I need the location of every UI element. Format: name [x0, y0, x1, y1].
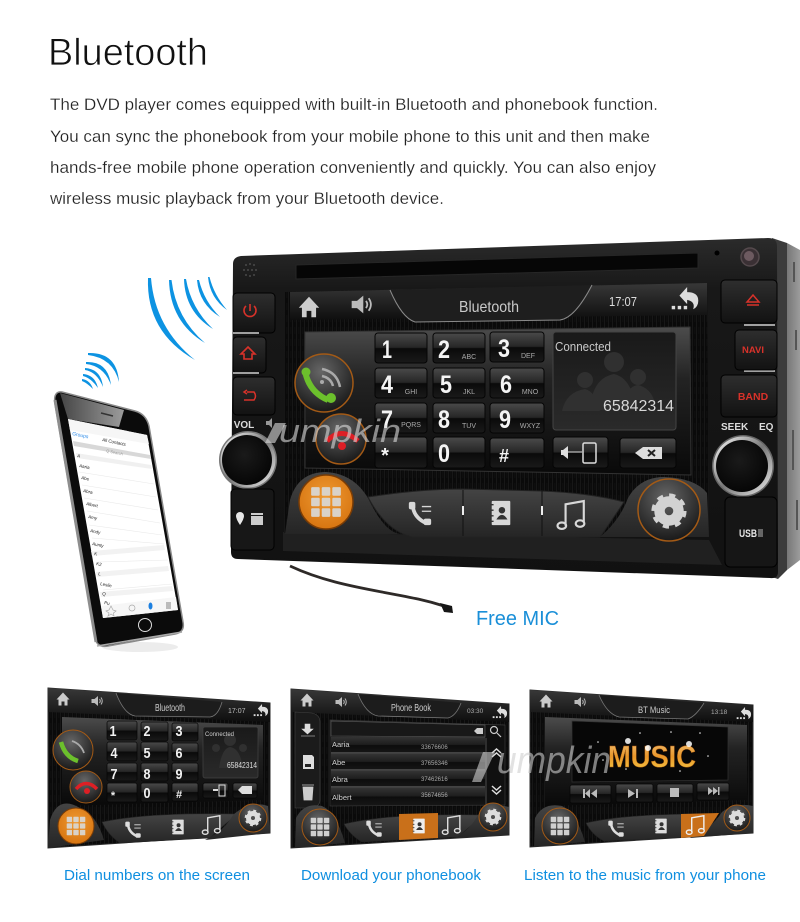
microphone cable	[290, 566, 453, 613]
answer call button	[295, 354, 353, 412]
right button: eject	[721, 280, 777, 323]
bottom dock left shape	[285, 472, 400, 534]
left button: home	[233, 337, 266, 373]
intro paragraph	[49, 96, 658, 208]
bottom dock right shape	[600, 477, 709, 537]
keypad digits: 7	[381, 406, 393, 434]
icon: speaker	[352, 296, 371, 313]
keypad letters: JKL	[463, 389, 475, 396]
seek and eq labels: SEEK	[721, 422, 749, 433]
phone screen text: Abra	[83, 488, 94, 495]
thumbnail: phone book screen: 03:30	[467, 708, 484, 715]
thumbnail: phone book screen: Aaria	[332, 740, 350, 749]
keypad digits	[381, 335, 512, 468]
thumbnail: dial screen	[48, 688, 270, 848]
thumbnail: bt music screen: MUSIC	[608, 739, 696, 774]
watermark: thumbnails: umpkin	[497, 740, 611, 782]
usb port label: USB	[739, 528, 757, 540]
keypad digits: 6	[500, 371, 512, 399]
thumbnail: phone book screen: Abra	[332, 775, 349, 784]
disc slot	[296, 253, 698, 279]
sensor dot and reset knob	[714, 248, 759, 266]
phone screen text: Pu	[104, 600, 111, 606]
speaker dots	[243, 263, 257, 277]
phone home button	[138, 618, 152, 632]
icon: contacts book	[491, 501, 510, 525]
caption: listen to music: Listen to the music from your phone	[524, 868, 766, 884]
phone screen text: Q Search	[106, 448, 123, 456]
car DVD head unit	[219, 238, 800, 579]
phone screen text: Abe	[81, 475, 90, 482]
screen title: Bluetooth	[459, 299, 519, 316]
phone screen text: Leslie	[100, 581, 113, 589]
thumbnail: dial screen: #	[176, 789, 182, 801]
intro paragraph: hands-free mobile phone operation conveniently and quickly. You can also enjoy	[50, 159, 657, 177]
settings gear button	[638, 479, 700, 541]
keypad digits: 1	[382, 336, 392, 364]
thumbnail: dial screen: 17:07	[228, 708, 246, 715]
phone screen text: Aunty	[92, 541, 105, 549]
thumbnail: dial screen: 65842314	[227, 761, 257, 770]
connected status panel: Connected	[555, 339, 611, 354]
phone screen	[68, 419, 178, 618]
thumbnail: bt music screen	[530, 690, 753, 847]
keypad digits: 0	[438, 440, 450, 468]
lower strip	[283, 532, 722, 565]
icon: music note	[558, 501, 584, 529]
keypad letters: MNO	[522, 389, 539, 396]
keypad letters: WXYZ	[520, 423, 541, 430]
phone screen text	[72, 431, 127, 606]
thumbnail: phone book screen: 37462616	[421, 777, 448, 783]
thumbnail: dial screen: 5	[144, 745, 150, 762]
keypad panel	[305, 327, 691, 475]
intro paragraph: You can sync the phonebook from your mobile phone to this unit and then make	[50, 128, 650, 146]
phone screen text: Amy	[88, 514, 98, 521]
volume label: VOL	[234, 420, 254, 431]
icon: large bluetooth signal waves	[148, 277, 227, 360]
thumbnail: dial screen: *	[111, 790, 116, 802]
screen top bar	[290, 283, 707, 320]
keypad letters: TUV	[462, 423, 476, 430]
left button: power	[233, 293, 275, 333]
right button: band	[721, 375, 777, 417]
thumbnail: bt music screen: BT Music	[638, 705, 670, 716]
lower left map and media buttons	[231, 489, 274, 550]
icon: call transfer	[409, 502, 431, 525]
icon: delete key	[635, 447, 662, 459]
keypad digits: 9	[499, 406, 511, 434]
keypad letters	[401, 353, 541, 430]
thumbnail: dial screen: 1	[110, 723, 116, 740]
free mic label: Free MIC	[476, 608, 559, 630]
thumbnail: dial screen: 8	[144, 766, 150, 783]
keypad letters: PQRS	[401, 422, 421, 429]
volume knob	[219, 431, 277, 489]
thumbnail: phone book screen: 37656346	[421, 761, 448, 767]
left button: back	[233, 377, 275, 415]
thumbnail: phone book screen: Abe	[332, 758, 345, 767]
phone screen text: Andy	[90, 528, 102, 535]
apps menu button	[299, 475, 353, 529]
thumbnail: dial screen: Bluetooth	[155, 703, 185, 714]
caption: dial numbers: Dial numbers on the screen	[64, 868, 250, 884]
keypad digits: 5	[440, 371, 452, 399]
right button: navi: NAVI	[742, 345, 764, 356]
usb port label	[725, 497, 777, 567]
right button: band: BAND	[738, 391, 769, 403]
thumbnail: dial screen: 2	[144, 723, 150, 740]
thumbnail: phone book screen: Phone Book	[391, 703, 432, 714]
thumbnail: dial screen: 9	[176, 766, 182, 783]
keypad letters: DEF	[521, 353, 535, 360]
icon: audio to phone key	[561, 443, 596, 463]
seek and eq labels	[721, 422, 774, 433]
keypad letters: GHI	[405, 389, 417, 396]
thumbnail: phone book screen: 35674656	[421, 793, 448, 799]
phone screen text: K2	[96, 561, 103, 567]
phone screen text: Groups	[72, 431, 89, 440]
phone screen text: Aaria	[79, 463, 91, 470]
clock: 17:07	[609, 294, 637, 309]
thumbnail: phone book screen: 33676606	[421, 745, 448, 751]
icon: back arrow	[672, 287, 698, 309]
seek and eq labels: EQ	[759, 422, 774, 433]
phone screen text: K	[94, 551, 98, 557]
unit side panel	[772, 238, 800, 579]
contact silhouettes	[562, 352, 654, 411]
keypad digits: 4	[381, 371, 393, 399]
thumbnail: dial screen: 0	[144, 785, 150, 802]
title notch	[390, 285, 592, 322]
keypad digits: #	[499, 446, 509, 466]
right button: navi	[735, 330, 777, 370]
icon: phone signal waves	[82, 353, 119, 389]
tune knob	[712, 435, 774, 497]
touch screen	[284, 283, 709, 541]
thumbnail: phone book screen	[291, 689, 509, 848]
smartphone	[55, 392, 183, 652]
unit front body	[231, 238, 778, 578]
keypad letters: ABC	[462, 354, 476, 361]
connected status panel	[553, 332, 676, 430]
title: Bluetooth	[48, 32, 208, 74]
phone screen text: Q	[102, 591, 107, 597]
intro paragraph: The DVD player comes equipped with built-in Bluetooth and phonebook function.	[50, 96, 658, 114]
keypad keys	[375, 332, 676, 468]
end call button	[316, 414, 366, 464]
bottom dock tab bar	[368, 489, 624, 537]
thumbnail: dial screen: 6	[176, 745, 182, 762]
phone screen text: A	[77, 453, 81, 459]
thumbnail: phone book screen: Albert	[332, 793, 353, 802]
volume label	[234, 418, 272, 431]
keypad digits: 3	[498, 335, 510, 363]
thumbnail: bt music screen: 13:18	[711, 709, 728, 716]
thumbnail: dial screen: 4	[110, 745, 118, 762]
caption: download phonebook: Download your phonebook	[301, 868, 482, 884]
intro paragraph: wireless music playback from your Bluetooth device.	[49, 190, 444, 208]
thumbnail: dial screen: 3	[176, 723, 182, 740]
phone toolbar icons	[106, 602, 171, 616]
thumbnail: dial screen: Connected	[205, 732, 234, 738]
keypad digits: 8	[438, 406, 450, 434]
connected status panel: 65842314	[603, 398, 674, 415]
thumbnail: dial screen: 7	[110, 766, 118, 783]
keypad digits: *	[381, 445, 389, 467]
icon: home	[299, 297, 319, 317]
keypad digits: 2	[438, 336, 450, 364]
phone screen text: L	[98, 571, 102, 577]
silver button separators	[233, 325, 775, 373]
phone screen text: All Contacts	[102, 437, 127, 447]
watermark: main unit: umpkin	[279, 413, 401, 449]
phone screen text: Albert	[86, 501, 99, 509]
